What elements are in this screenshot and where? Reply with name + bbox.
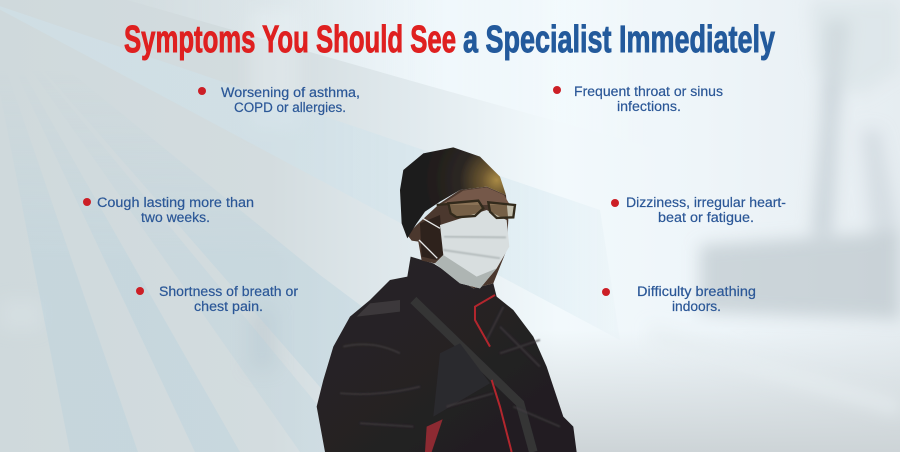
jacket xyxy=(317,257,577,452)
face mask xyxy=(435,210,509,288)
symptom: breathing indoors: indoors. xyxy=(672,299,721,314)
symptom: breathing indoors xyxy=(602,284,756,314)
symptom: asthma: COPD or allergies. xyxy=(234,100,346,115)
glasses xyxy=(437,201,515,218)
symptom: dizziness xyxy=(611,195,786,225)
red lining patch xyxy=(425,419,443,452)
forehead skin xyxy=(443,187,510,205)
symptom: breathing indoors: Difficulty breathing xyxy=(637,284,756,299)
person wearing a mask xyxy=(317,147,577,452)
mask ear loops xyxy=(419,218,440,258)
beanie xyxy=(400,147,506,238)
title: Symptoms You Should See xyxy=(124,19,456,61)
symptom: cough: two weeks. xyxy=(141,210,210,225)
symptom: asthma xyxy=(198,85,360,115)
title: a Specialist Immediately xyxy=(463,19,775,61)
symptom: throat infections xyxy=(553,84,723,114)
symptom: shortness of breath: chest pain. xyxy=(194,299,263,314)
symptom: throat infections: Frequent throat or sinus xyxy=(574,84,723,99)
symptom: shortness of breath: Shortness of breath or xyxy=(159,284,299,299)
beard xyxy=(420,215,443,260)
face xyxy=(407,187,508,288)
symptom: dizziness: beat or fatigue. xyxy=(658,210,754,225)
symptom: asthma: Worsening of asthma, xyxy=(221,85,360,100)
red zipper lining xyxy=(475,295,512,452)
jacket quilting and strap xyxy=(340,300,560,452)
light rays xyxy=(0,0,700,452)
symptom: shortness of breath xyxy=(136,284,299,314)
symptom: dizziness: Dizziness, irregular heart- xyxy=(626,195,786,210)
mask pleats xyxy=(443,237,506,258)
symptom: throat infections: infections. xyxy=(617,99,681,114)
mask lower fold xyxy=(435,255,497,288)
symptom: cough xyxy=(83,195,254,225)
symptom: cough: Cough lasting more than xyxy=(97,195,254,210)
